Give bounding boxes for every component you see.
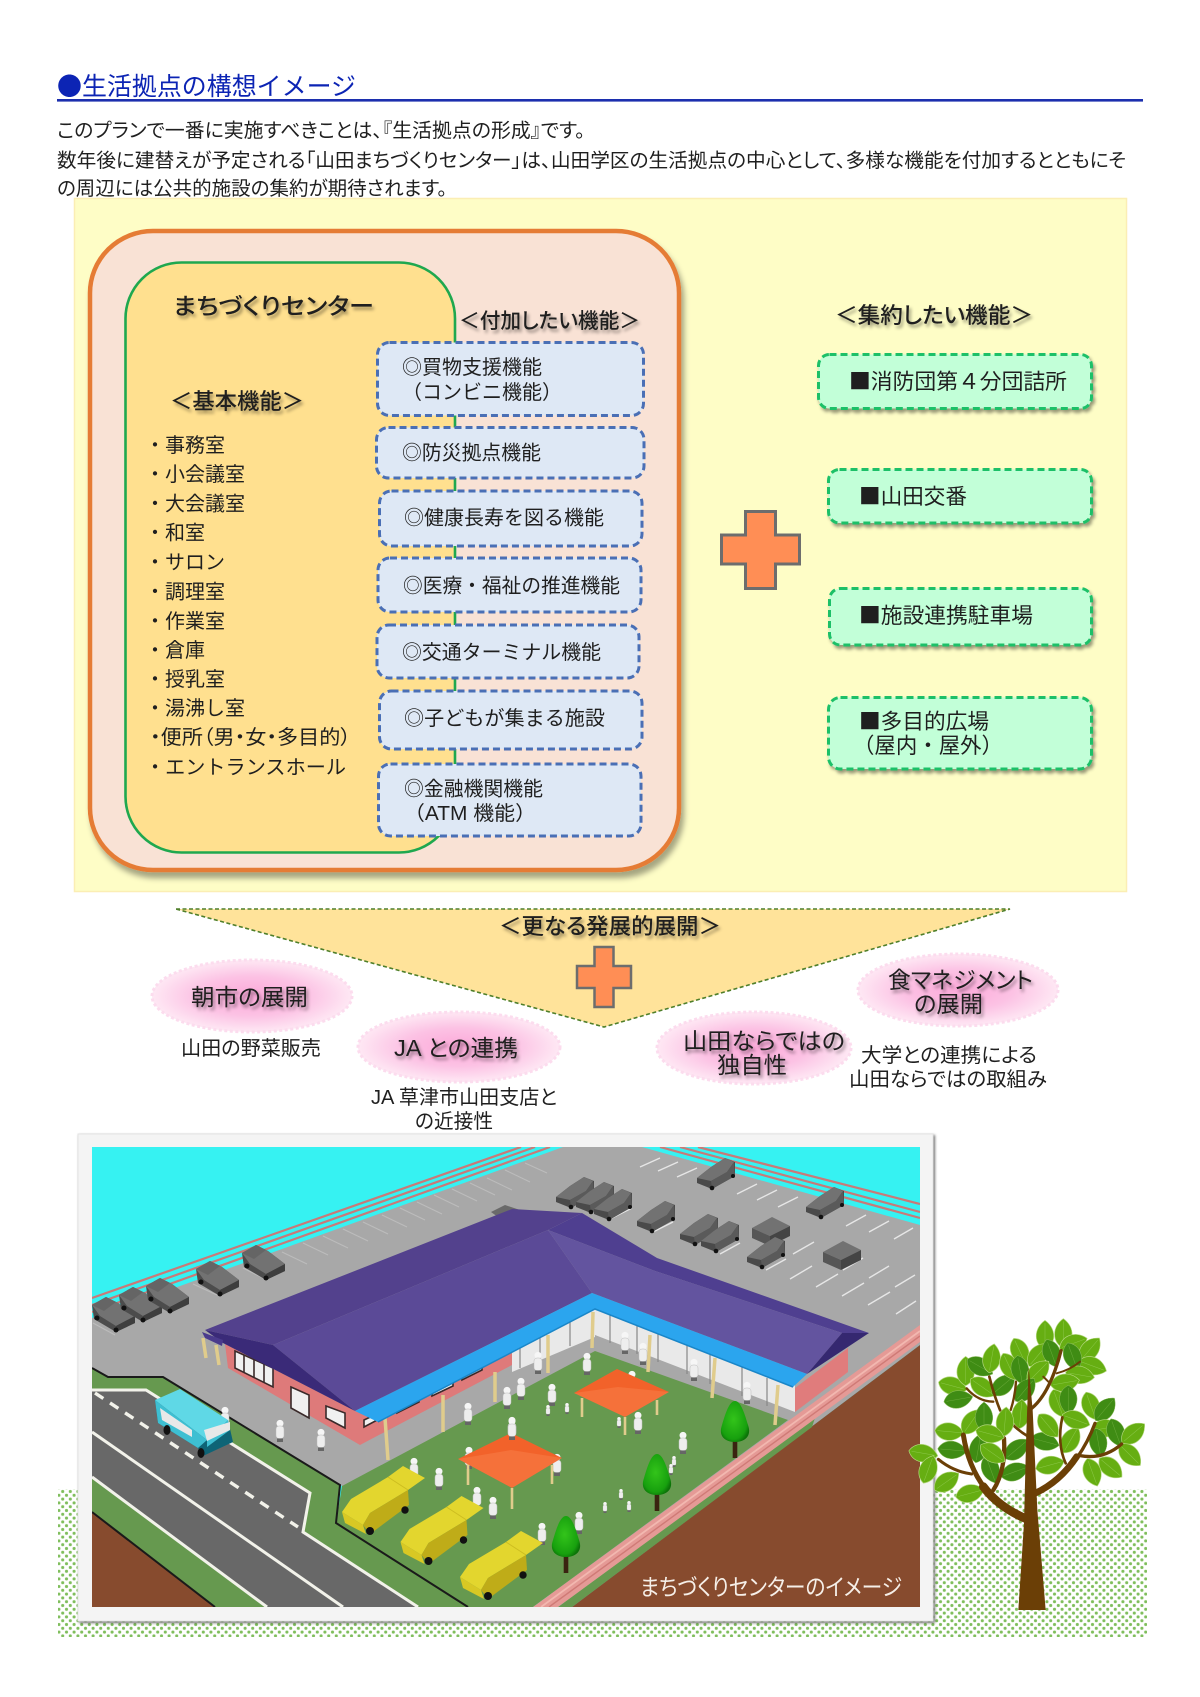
caption: JA proximity: JA 草津市山田支店と [371,1086,557,1109]
bubble: food management: の展開 [914,991,983,1017]
box: medical and welfare [378,558,641,612]
heading: further development: ＜更なる発展的展開＞ [499,914,721,939]
list: basic functions: ・授乳室 [145,668,225,691]
caption: vegetable sales: 山田の野菜販売 [181,1037,321,1060]
box: disaster prevention: ◎防災拠点機能 [402,436,541,466]
box: shared parking [830,588,1092,645]
caption: university partnership: 山田ならではの取組み [849,1068,1047,1091]
gray wall end [512,1305,595,1372]
box: health and longevity [380,491,642,546]
list: basic functions: ・調理室 [145,580,225,604]
intro text: の周辺には公共的施設の集約が期待されます。 [57,178,447,200]
title: ●生活拠点の構想イメージ [57,67,356,103]
leaves front [974,1406,1015,1469]
list: functions to add [376,342,644,836]
caption: university partnership [849,1044,1047,1091]
box: financial institution: （ATM 機能） [404,802,536,825]
leaves back [907,1319,1150,1506]
green strip right [558,1418,815,1607]
icon: plus between columns [722,512,800,588]
box: children gathering: ◎子どもが集まる施設 [404,702,605,731]
parking lot [92,1147,920,1607]
intro text: 数年後に建替えが予定される「山田まちづくりセンター」は、山田学区の生活拠点の中心として、多様な機能を付加するとともにそ [57,150,1126,172]
cars [92,1158,861,1332]
bubble: yamada uniqueness: 独自性 [717,1052,787,1078]
box: police box [828,470,1092,523]
list: basic functions: ・作業室 [145,610,225,633]
tent near [458,1433,562,1509]
trees [552,1401,749,1573]
bus [155,1389,233,1458]
list: basic functions: ・大会議室 [145,492,245,516]
bubble: JA partnership [358,1012,560,1082]
roof front slope right [548,1230,842,1374]
columns [385,1312,778,1460]
list: basic functions: ・倉庫 [145,639,205,662]
tent far [574,1369,669,1435]
caption: JA proximity: の近接性 [415,1110,493,1133]
road [92,1390,418,1607]
roof gable right [807,1333,869,1374]
box: health and longevity: ◎健康長寿を図る機能 [404,502,604,530]
bubble: morning market: 朝市の展開 [191,984,308,1010]
list: basic functions: ・和室 [145,522,205,544]
caption: university partnership: 大学との連携による [861,1044,1037,1067]
box: transport terminal: ◎交通ターミナル機能 [402,636,601,665]
arrow: further development triangle [176,909,1010,1027]
window bank [235,1351,482,1428]
brown ground left [92,1512,215,1607]
pink wall left wing [225,1338,512,1445]
heading: machizukuri center: まちづくりセンター [173,293,374,319]
green verge [92,1368,468,1607]
heading: basic functions: ＜基本機能＞ [170,389,304,414]
box: fire brigade: ■消防団第４分団詰所 [849,365,1067,396]
illustration: leafy tree [907,1319,1150,1610]
caption: JA proximity [371,1086,557,1133]
icon: plus in triangle [577,947,631,1007]
box: shopping support [378,342,644,416]
box: police box: ■山田交番 [859,480,967,511]
yellow carts [342,1466,543,1600]
bubble: food management [858,954,1058,1026]
box: fire brigade [818,354,1092,408]
list: basic functions [145,434,351,779]
pink path right [533,1325,920,1607]
roof back slope left [205,1209,582,1345]
people [221,1332,751,1545]
caption in image: まちづくりセンターのイメージ [640,1574,902,1600]
blue gutter [355,1293,807,1422]
road markings [92,1390,418,1607]
parking lines [93,1163,547,1335]
box: multipurpose plaza: ■多目的広場 [859,705,989,736]
trunk and branches [938,1351,1122,1610]
boundary stripes [92,1147,920,1312]
heading: functions to add: ＜付加したい機能＞ [459,310,640,333]
roof back slope right [548,1213,869,1333]
list: basic functions: ・事務室 [145,434,225,457]
heading: functions to consolidate: ＜集約したい機能＞ [835,303,1033,328]
panel: concept diagram [74,198,1126,892]
box: financial institution: ◎金融機関機能 [404,772,543,802]
list: basic functions: ・便所（男・女・多目的） [150,726,351,749]
list: basic functions: ・小会議室 [145,463,245,486]
box: children gathering [380,691,642,749]
bubble: JA partnership: JA との連携 [394,1035,518,1061]
panel: machizukuri center basic functions [126,262,455,852]
box: medical and welfare: ◎医療・福祉の推進機能 [403,570,620,598]
bubble: yamada uniqueness: 山田ならではの [683,1028,845,1054]
box: shopping support: （コンビニ機能） [402,376,562,405]
roof front slope left [273,1230,592,1411]
list: basic functions: ・サロン [145,552,225,574]
courtyard lawn [336,1351,788,1607]
bubble: morning market [152,960,352,1032]
white wall right wing [595,1305,795,1412]
list: basic functions: ・エントランスホール [145,757,346,779]
roof hip left [205,1330,355,1411]
panel: outer orange rounded box [90,231,679,870]
end posts [203,1338,219,1365]
brown ground right [572,1345,920,1607]
list: basic functions: ・湯沸し室 [145,697,245,720]
bubble: yamada uniqueness [657,1012,851,1084]
bubble: food management: 食マネジメント [888,967,1033,993]
box: multipurpose plaza [828,698,1092,769]
list: functions to consolidate [818,354,1092,769]
intro text [57,120,1126,200]
box: financial institution [378,764,641,836]
background: grass dot pattern [58,1489,1147,1637]
curb lines [92,1368,468,1607]
box: transport terminal [377,625,639,678]
lower verge [92,1477,267,1607]
panel: illustration frame [78,1134,933,1621]
building [202,1209,869,1460]
box: multipurpose plaza: （屋内・屋外） [853,729,1003,760]
illustration: machizukuri center [92,1147,920,1607]
pink wall right end [795,1348,848,1412]
box: shopping support: ◎買物支援機能 [402,351,542,380]
box: disaster prevention [376,428,644,478]
box: shared parking: ■施設連携駐車場 [859,599,1033,630]
intro text: このプランで一番に実施すべきことは、『生活拠点の形成』です。 [57,120,585,142]
sky [92,1147,920,1607]
